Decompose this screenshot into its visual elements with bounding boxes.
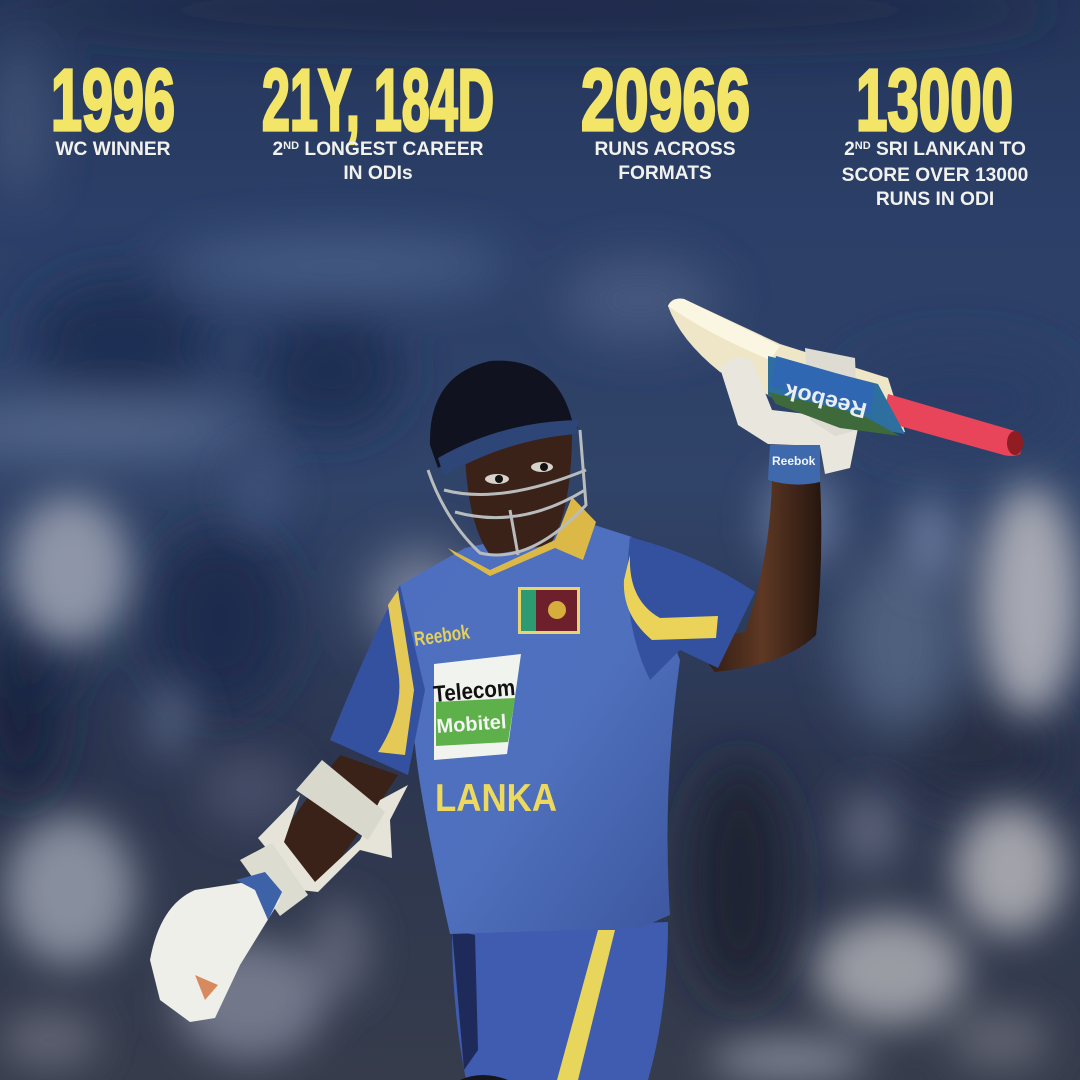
stat: 13000 ODI runs: ND	[855, 140, 871, 152]
stat: 1996 WC winner	[51, 52, 175, 160]
stat: 1996 WC winner: 1996	[51, 52, 175, 149]
stat: 13000 ODI runs: RUNS IN ODI	[876, 189, 994, 210]
sponsor patch	[432, 654, 521, 760]
chest emblem: Sri Lanka crest	[518, 587, 580, 634]
lower arm	[270, 755, 398, 890]
stat: 20966 runs: RUNS ACROSS	[594, 139, 736, 160]
elbow guard	[296, 760, 385, 840]
stat: 21Y, 184D career length: LONGEST CAREER	[299, 139, 484, 160]
sponsor patch: Mobitel	[436, 711, 507, 738]
jersey body	[395, 522, 680, 934]
headline statistics row	[51, 52, 1028, 210]
player illustration	[150, 299, 1023, 1080]
stat: 13000 ODI runs	[842, 52, 1028, 210]
bat label	[768, 356, 905, 436]
Reebok logo on jersey: Reebok	[413, 621, 472, 651]
stat: 13000 ODI runs: SRI LANKAN TO	[871, 139, 1026, 160]
helmet	[430, 361, 578, 476]
stat: 13000 ODI runs: SCORE OVER 13000	[842, 165, 1028, 186]
helmet grille	[428, 430, 586, 555]
stat: 21Y, 184D career length	[262, 52, 494, 184]
stat: 13000 ODI runs: 2	[844, 139, 855, 160]
stat: 21Y, 184D career length: IN ODIs	[343, 163, 413, 184]
raised glove and wristband: Reebok	[772, 454, 816, 468]
stat: 1996 WC winner: WC WINNER	[55, 139, 171, 160]
neck and face	[465, 420, 572, 555]
stat: 21Y, 184D career length: 21Y, 184D	[262, 52, 494, 149]
stat: 20966 runs	[581, 52, 750, 184]
raised glove and wristband	[720, 348, 858, 485]
stat: 21Y, 184D career length: ND	[283, 140, 299, 152]
LANKA lettering: LANKA	[435, 777, 557, 820]
bat label: Reebok	[781, 379, 869, 423]
raised arm	[690, 480, 821, 672]
torn tape around elbow	[258, 785, 408, 892]
collar	[448, 497, 596, 576]
right sleeve	[624, 537, 755, 680]
eyes	[485, 462, 553, 484]
stat: 20966 runs: FORMATS	[618, 163, 712, 184]
lower glove	[150, 872, 282, 1022]
trousers	[452, 922, 668, 1080]
stat: 21Y, 184D career length: 2	[272, 139, 283, 160]
left sleeve	[330, 585, 425, 775]
stat: 20966 runs: 20966	[581, 52, 750, 149]
cricket bat	[668, 299, 1023, 456]
wrist guard	[240, 843, 308, 916]
sponsor patch: Telecom	[432, 674, 516, 707]
